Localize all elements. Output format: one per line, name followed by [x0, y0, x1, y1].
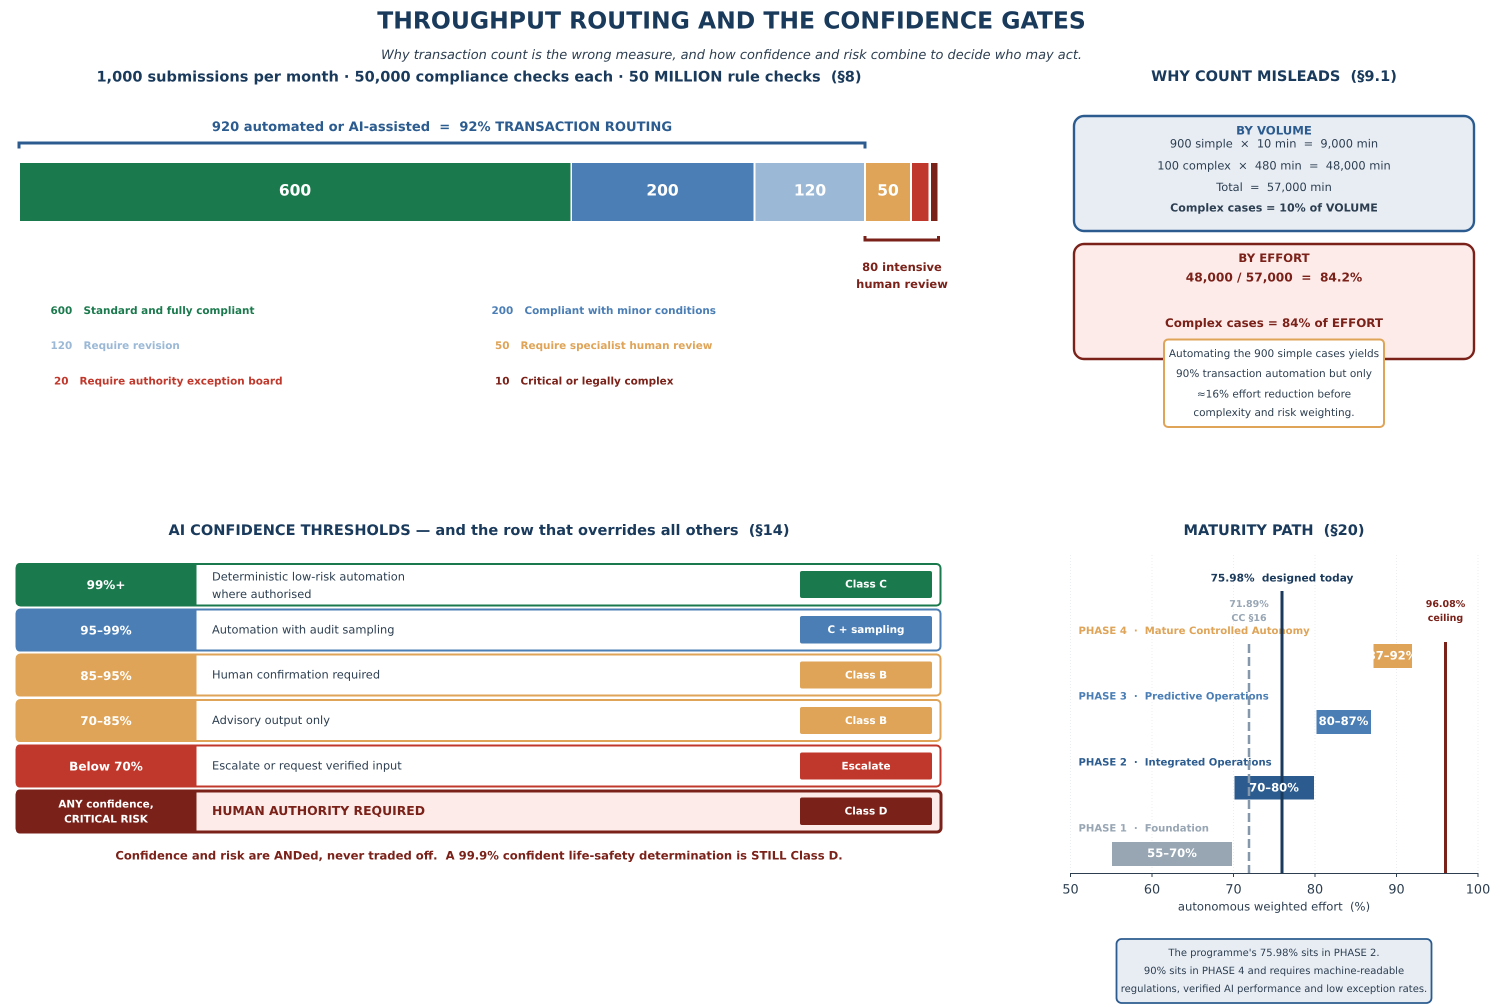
phase 4 band: 87–92%: [1368, 648, 1418, 662]
callout: automation note: complexity and risk weighting.: [1193, 407, 1355, 419]
phase 2 value label: 70–80%: [1249, 780, 1299, 794]
callout: automation note: [1164, 340, 1384, 427]
panel: by effort: [1074, 244, 1474, 359]
row: 99%+: Deterministic low-risk automation: [212, 570, 405, 584]
callout: automation note: Automating the 900 simple cases yields: [1169, 348, 1379, 360]
row: below 70%: Escalate or request verified input: [212, 758, 402, 772]
axis: 70: [1225, 882, 1242, 898]
row: 99%+: 99%+: [87, 578, 125, 592]
phase 3 band: 80–87%: [1319, 714, 1369, 728]
row: 70–85%: Class B: [845, 715, 887, 727]
heading: maturity path: MATURITY PATH (§20): [1184, 522, 1364, 539]
subtitle: Why transaction count is the wrong measure, and how confidence and risk combine to decide who may act.: [381, 48, 1082, 63]
marker: designed today 75.98%: 75.98% designed today: [1211, 572, 1354, 584]
human review label: human review: [856, 277, 948, 291]
row: 70–85%: 70–85%: [80, 714, 132, 728]
human review label: 80 intensive: [862, 260, 942, 274]
marker: CC §16 71.89%: CC §16: [1231, 613, 1267, 624]
panel: by effort: Complex cases = 84% of EFFORT: [1165, 316, 1384, 330]
row: 99%+: Class C: [845, 578, 887, 590]
row: critical risk: ANY confidence,: [58, 798, 154, 810]
row: below 70%: Escalate: [841, 760, 891, 772]
row: 99%+: where authorised: [212, 587, 311, 601]
row: 99%+: [16, 563, 940, 606]
bracket: automated: [19, 143, 865, 148]
legend item 10: 10: [495, 376, 510, 388]
legend item 120: Require revision: [84, 340, 180, 352]
segment 200: 200: [646, 182, 679, 200]
segment 20: [912, 163, 928, 221]
panel: by volume: 900 simple × 10 min = 9,000 min: [1170, 136, 1378, 150]
panel: transaction routing: [19, 120, 948, 388]
title: THROUGHPUT ROUTING AND THE CONFIDENCE GATES: [377, 6, 1086, 34]
stacked bar: [20, 163, 938, 221]
legend item 50: 50: [495, 340, 510, 352]
phase 1 band: PHASE 1 · Foundation: [1078, 824, 1209, 834]
legend: [50, 305, 716, 388]
legend item 200: Compliant with minor conditions: [524, 305, 716, 317]
phase 2 band: [1078, 758, 1314, 800]
row: 70–85%: [16, 700, 940, 742]
row: 95–99%: Automation with audit sampling: [212, 622, 394, 636]
axis: 50: [1062, 882, 1079, 898]
phase 2 band: PHASE 2 · Integrated Operations: [1078, 758, 1272, 768]
legend item 10: Critical or legally complex: [520, 376, 674, 388]
segment 600: [20, 163, 570, 221]
row: 85–95%: Class B: [845, 670, 887, 682]
panel: by volume: BY VOLUME: [1236, 124, 1312, 138]
legend item 20: 20: [54, 376, 69, 388]
row: 95–99%: [16, 609, 940, 652]
marker: ceiling 96.08%: 96.08%: [1426, 599, 1466, 610]
marker: ceiling 96.08%: [1426, 599, 1466, 873]
legend item 600: Standard and fully compliant: [84, 305, 254, 317]
row: below 70%: [16, 744, 940, 788]
marker: CC §16 71.89%: 71.89%: [1229, 599, 1269, 610]
axis: 100: [1466, 882, 1490, 898]
row: critical risk: [16, 790, 941, 834]
heading: confidence thresholds: AI CONFIDENCE THRESHOLDS — and the row that overrides all others (§14): [168, 522, 790, 539]
callout: programme note: [1116, 939, 1432, 1003]
panel: confidence table: [16, 563, 941, 834]
row: 85–95%: Human confirmation required: [212, 668, 380, 682]
row: critical risk: Class D: [845, 806, 888, 818]
axis: 60: [1144, 882, 1160, 898]
legend item 120: 120: [50, 340, 72, 352]
phase 1 band: [1078, 824, 1232, 866]
legend item 20: Require authority exception board: [80, 376, 283, 388]
callout: programme note: 90% sits in PHASE 4 and requires machine-readable: [1144, 966, 1404, 977]
phase 3 band: [1078, 692, 1371, 734]
legend item 50: Require specialist human review: [520, 340, 713, 352]
segment 600: 600: [279, 182, 311, 200]
panel: by effort: 48,000 / 57,000 = 84.2%: [1186, 270, 1362, 284]
human review label: [856, 260, 948, 291]
row: 85–95%: 85–95%: [80, 669, 132, 683]
axis: 80: [1307, 882, 1323, 898]
panel: by volume: Complex cases = 10% of VOLUME: [1170, 202, 1378, 214]
legend item 600: 600: [50, 305, 72, 317]
phase 4 band: [1078, 626, 1418, 668]
heading: why count misleads: WHY COUNT MISLEADS (§9.1): [1151, 68, 1397, 85]
axis: [1062, 874, 1490, 914]
row: critical risk: HUMAN AUTHORITY REQUIRED: [212, 803, 425, 818]
segment 120: [756, 163, 864, 221]
footnote: confidence and risk: Confidence and risk are ANDed, never traded off. A 99.9% confident life-safety determination is STILL Class D.: [115, 848, 843, 862]
routing bracket label: 920 automated or AI-assisted = 92% TRANSACTION ROUTING: [212, 120, 672, 135]
phase 4 band: PHASE 4 · Mature Controlled Autonomy: [1078, 626, 1310, 637]
callout: programme note: The programme's 75.98% sits in PHASE 2.: [1167, 948, 1380, 959]
row: below 70%: Below 70%: [69, 760, 143, 774]
marker: ceiling 96.08%: ceiling: [1428, 613, 1463, 624]
heading: throughput: 1,000 submissions per month · 50,000 compliance checks each · 50 MILLION rule checks (§8): [96, 68, 862, 86]
segment 10: [931, 163, 938, 221]
segment 50: 50: [877, 182, 899, 200]
callout: automation note: ≈16% effort reduction before: [1197, 388, 1351, 400]
segment 50: [866, 163, 910, 221]
chart: maturity path: [1062, 555, 1490, 914]
segment 200: [572, 163, 754, 221]
row: critical risk: CRITICAL RISK: [64, 814, 149, 826]
callout: programme note: regulations, verified AI performance and low exception rates.: [1121, 984, 1427, 995]
row: 85–95%: [16, 654, 940, 696]
segment 120: 120: [794, 182, 826, 200]
axis: autonomous weighted effort (%): [1178, 900, 1370, 914]
callout: automation note: 90% transaction automation but only: [1176, 368, 1372, 380]
marker: CC §16 71.89%: [1229, 599, 1269, 873]
panel: by volume: [1074, 116, 1474, 231]
panel: by volume: Total = 57,000 min: [1215, 180, 1332, 194]
panel: by effort: BY EFFORT: [1238, 251, 1310, 265]
bracket: human review: [865, 236, 938, 240]
axis: 90: [1388, 882, 1405, 898]
row: 95–99%: C + sampling: [828, 624, 904, 636]
panel: by volume: 100 complex × 480 min = 48,000 min: [1157, 158, 1391, 172]
phase 1 band: 55–70%: [1147, 846, 1197, 860]
legend item 200: 200: [492, 305, 513, 317]
phase 3 band: PHASE 3 · Predictive Operations: [1078, 692, 1269, 702]
row: 70–85%: Advisory output only: [212, 713, 330, 727]
row: 95–99%: 95–99%: [80, 624, 132, 638]
